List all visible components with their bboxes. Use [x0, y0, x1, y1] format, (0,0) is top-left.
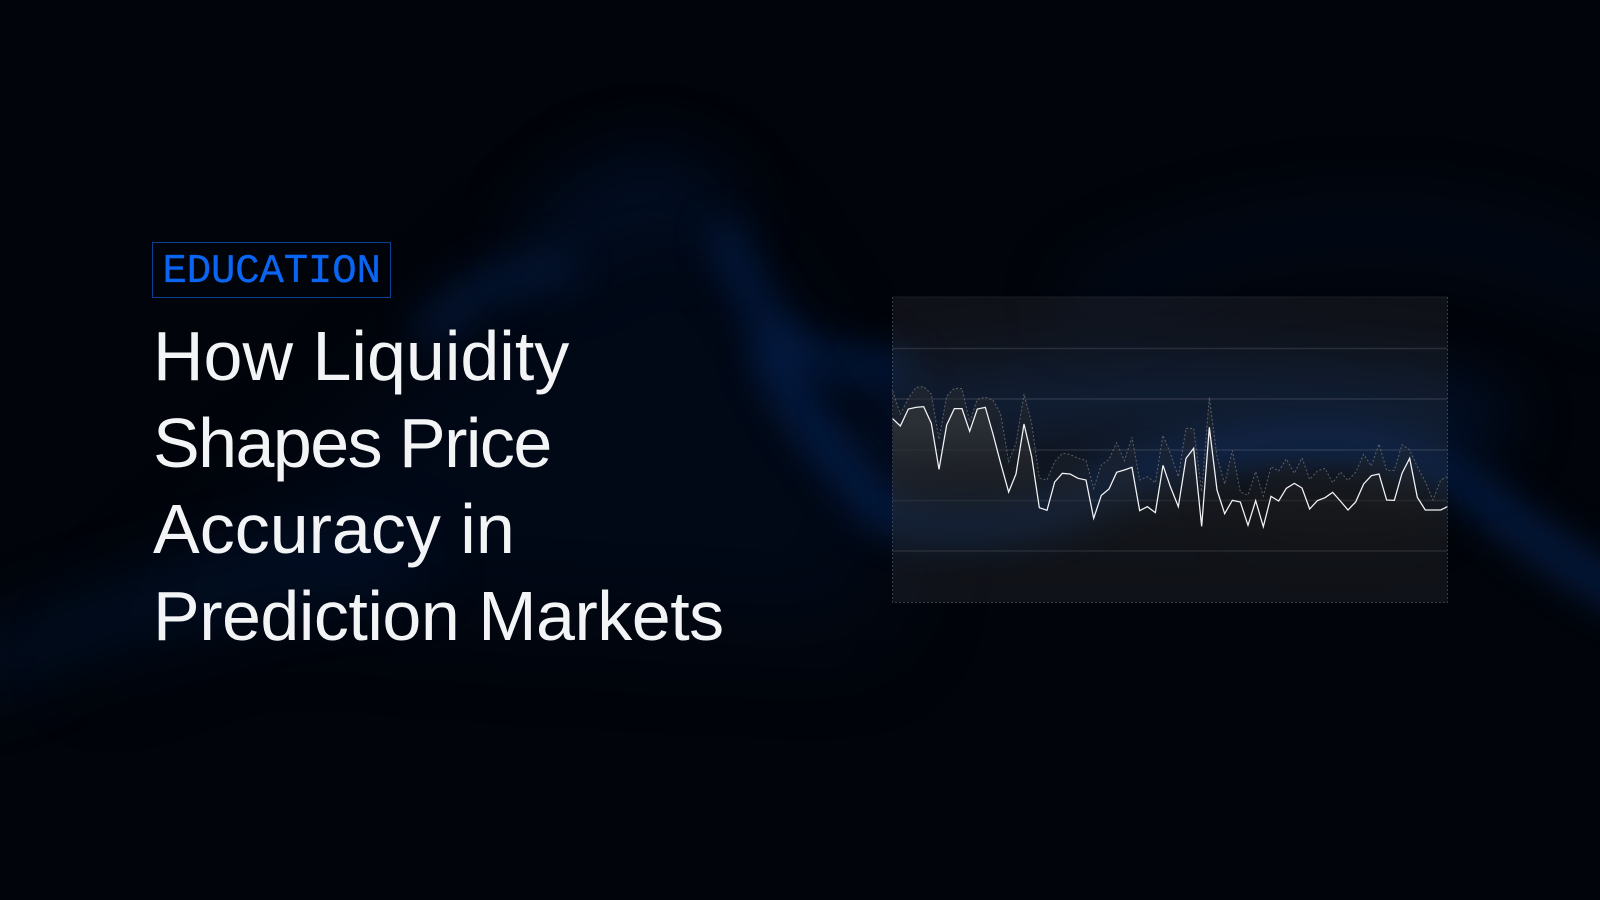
- band area: [893, 387, 1447, 602]
- title: [153, 317, 724, 654]
- panel background: [892, 298, 1448, 602]
- panel border: [892, 297, 1448, 602]
- title: Shapes Price: [153, 404, 551, 482]
- title: How Liquidity: [153, 317, 569, 395]
- broad dim mass under the wave: [60, 170, 900, 680]
- upper band dotted line: [893, 387, 1447, 500]
- dark patch behind chart: [1220, 481, 1450, 549]
- area below price line: [893, 407, 1447, 602]
- title: Accuracy in: [153, 490, 515, 568]
- price line: [893, 407, 1447, 527]
- grid lines: [892, 348, 1447, 551]
- tag: EDUCATION: EDUCATION: [162, 249, 381, 295]
- title: Prediction Markets: [153, 576, 724, 654]
- line chart: price and upper band: [893, 387, 1447, 602]
